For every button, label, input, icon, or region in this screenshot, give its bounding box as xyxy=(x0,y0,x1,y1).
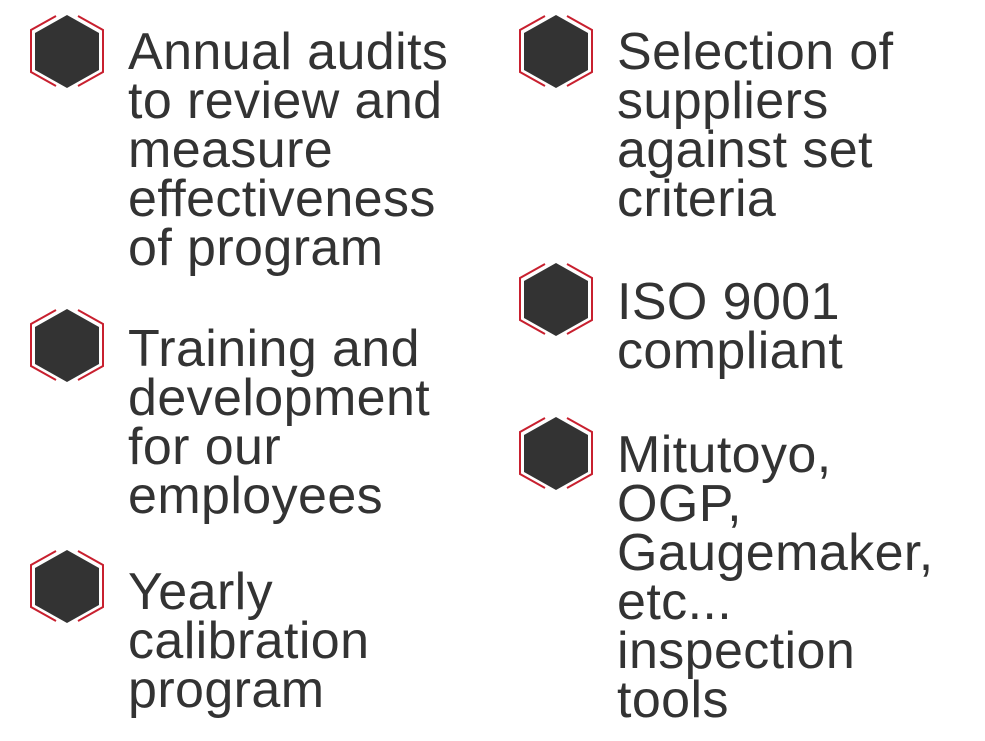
text: calibration: calibration xyxy=(128,612,369,670)
icon: hexagon 1 xyxy=(30,15,104,88)
text: suppliers: criteria xyxy=(617,170,776,228)
text: training: Training and xyxy=(128,320,420,378)
text: annual audits: effectiveness xyxy=(128,170,436,228)
text: training: development xyxy=(128,369,430,427)
text: tools: OGP, xyxy=(617,475,742,533)
text: annual audits: of program xyxy=(128,219,383,277)
text: tools xyxy=(617,426,934,729)
text: annual audits: to review and xyxy=(128,72,442,130)
text: training xyxy=(128,320,430,525)
text: tools: Gaugemaker, xyxy=(617,524,934,582)
icon: hexagon 2 xyxy=(30,309,104,382)
text: tools: inspection xyxy=(617,622,855,680)
text: suppliers: suppliers xyxy=(617,72,829,130)
text: iso xyxy=(617,273,843,380)
text: training: employees xyxy=(128,467,383,525)
text: calibration xyxy=(128,563,369,719)
text: iso: compliant xyxy=(617,322,843,380)
text: suppliers xyxy=(617,23,894,228)
text: annual audits xyxy=(128,23,448,277)
text: suppliers: Selection of xyxy=(617,23,894,81)
icon: hexagon 5 xyxy=(519,263,593,336)
text: calibration: Yearly xyxy=(128,563,273,621)
icon: hexagon 3 xyxy=(30,550,104,623)
text: iso: ISO 9001 xyxy=(617,273,840,331)
icon: hexagon 4 xyxy=(519,15,593,88)
text: tools: Mitutoyo, xyxy=(617,426,832,484)
text: annual audits: Annual audits xyxy=(128,23,448,81)
text: suppliers: against set xyxy=(617,121,873,179)
icon: hexagon 6 xyxy=(519,417,593,490)
text: annual audits: measure xyxy=(128,121,333,179)
text: training: for our xyxy=(128,418,281,476)
text: calibration: program xyxy=(128,661,324,719)
text: tools: tools xyxy=(617,671,729,729)
text: tools: etc... xyxy=(617,573,732,631)
